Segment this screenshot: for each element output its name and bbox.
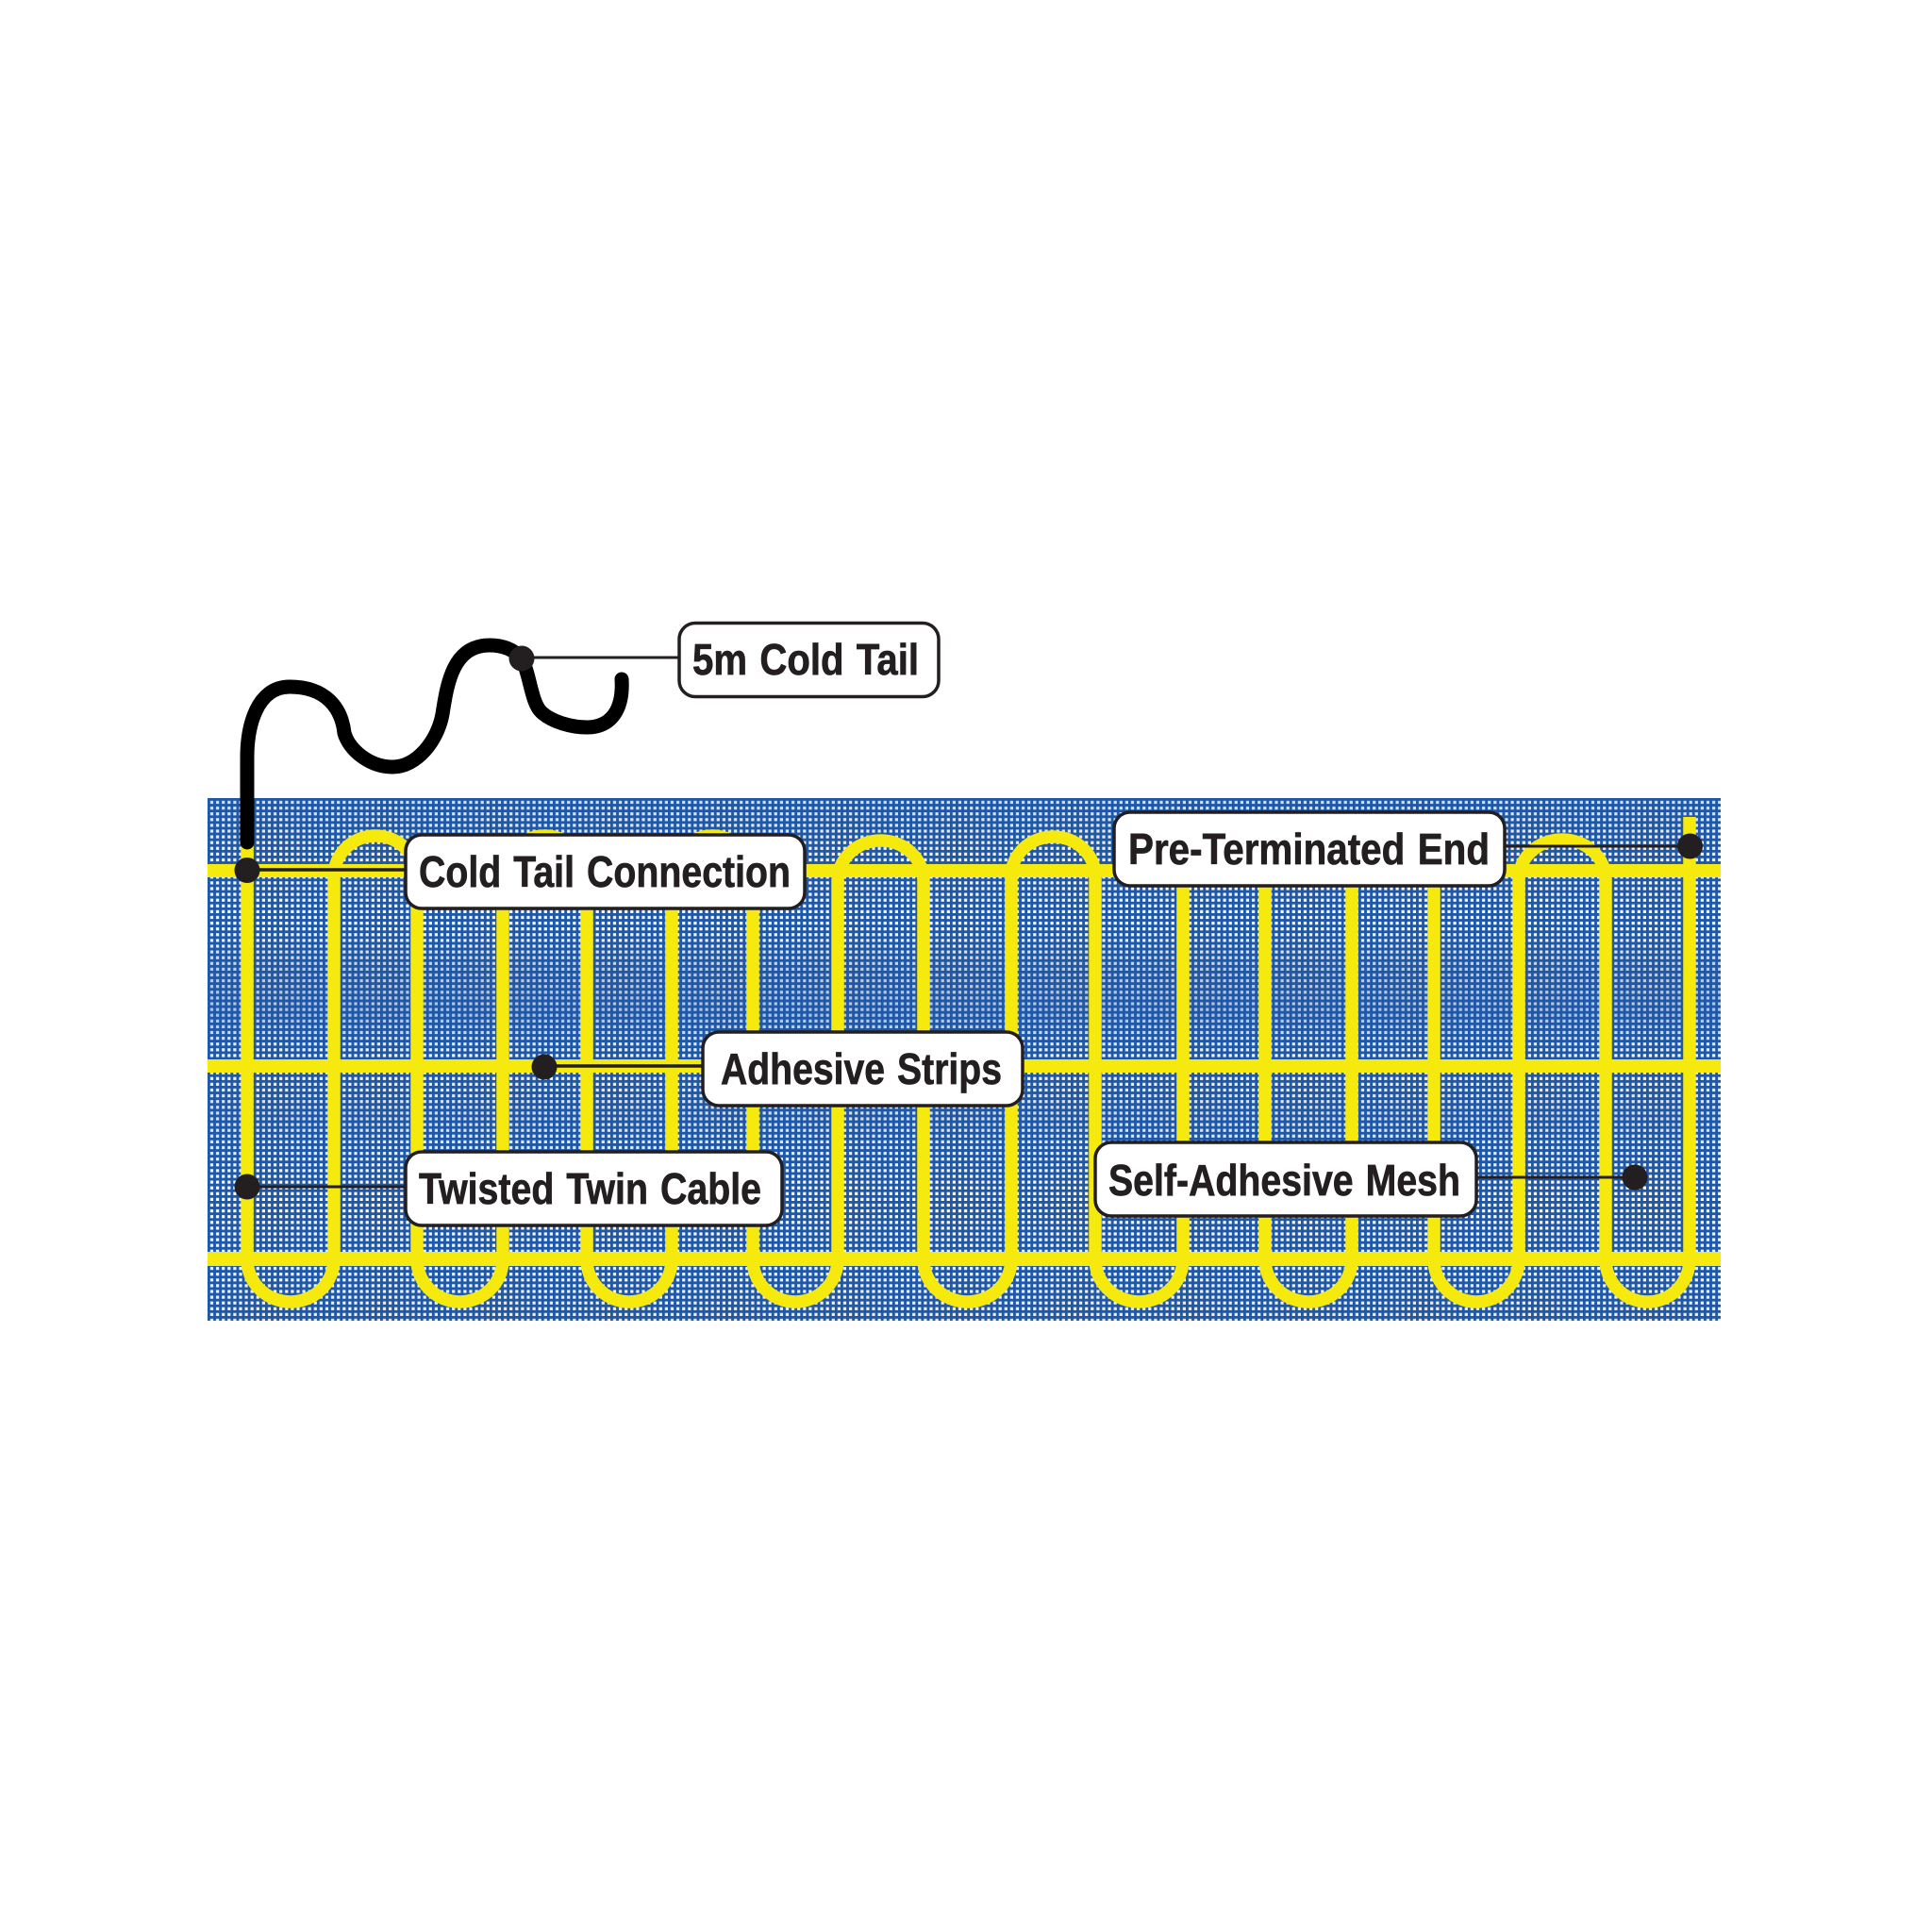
leader line: adhesive strips: [544, 1064, 703, 1068]
5m cold tail black cable: [247, 645, 622, 842]
label: Twisted Twin Cable: Twisted Twin Cable: [419, 1164, 761, 1213]
label: Pre-Terminated End: Pre-Terminated End: [1128, 824, 1490, 874]
marker dot: self-adhesive mesh: [1623, 1164, 1647, 1191]
marker dot: cold tail connection: [234, 858, 260, 883]
label: Twisted Twin Cable: [406, 1152, 782, 1225]
leader line: twisted twin cable: [247, 1185, 406, 1189]
leader line: pre-terminated end: [1505, 845, 1690, 847]
label: Adhesive Strips: [703, 1032, 1023, 1106]
self-adhesive mesh background: [208, 798, 1721, 1321]
label: Cold Tail Connection: [406, 835, 805, 908]
label: Pre-Terminated End: [1114, 812, 1505, 886]
marker dot: twisted twin cable: [234, 1174, 260, 1200]
marker dot: pre-terminated end: [1677, 834, 1703, 858]
label: Self-Adhesive Mesh: Self-Adhesive Mesh: [1108, 1156, 1460, 1205]
label: 5m Cold Tail: 5m Cold Tail: [692, 635, 919, 684]
label: Self-Adhesive Mesh: [1095, 1142, 1476, 1216]
adhesive strips: [208, 864, 1721, 1266]
twisted twin heating cable: [247, 817, 1690, 1302]
marker dot: 5m cold tail: [509, 645, 534, 672]
leader line: 5m cold tail: [522, 657, 679, 658]
marker dot: adhesive strips: [532, 1055, 557, 1079]
leader line: self-adhesive mesh: [1476, 1175, 1635, 1179]
label: Adhesive Strips: Adhesive Strips: [721, 1044, 1002, 1093]
label: Cold Tail Connection: Cold Tail Connection: [419, 847, 791, 896]
label: 5m Cold Tail: [679, 623, 939, 696]
leader line: cold tail connection: [247, 868, 406, 872]
